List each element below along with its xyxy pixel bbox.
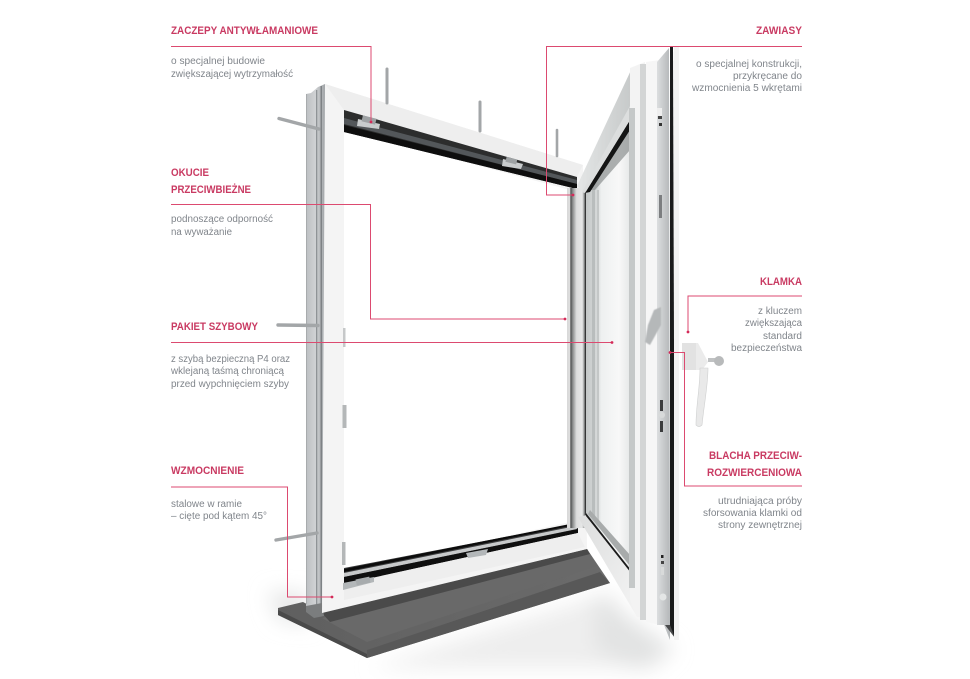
label: pakiet szybowy	[170, 321, 613, 390]
hardware strip	[657, 48, 670, 640]
black gasket	[670, 47, 675, 638]
label: zaczepy antywlamaniowe: ZACZEPY ANTYWŁAMANIOWE	[171, 25, 318, 37]
bottom hardware: keepers	[343, 549, 488, 590]
frame front face	[322, 84, 587, 613]
label: wzmocnienie: stalowe w ramie	[171, 499, 242, 510]
label: zawiasy: wzmocnienia 5 wkrętami	[691, 83, 802, 94]
floor shadow	[268, 592, 675, 670]
label: pakiet szybowy: wklejaną taśmą chroniącą	[170, 366, 284, 377]
bottom reveal	[344, 523, 585, 600]
label: okucie przeciwbiezne: PRZECIWBIEŻNE	[171, 183, 251, 196]
key	[708, 356, 724, 366]
label: blacha przeciwrozwierceniowa	[669, 351, 802, 531]
label: klamka: zwiększająca	[745, 318, 802, 329]
label: okucie przeciwbiezne: podnoszące odporność	[171, 214, 273, 225]
sash top slope	[577, 68, 632, 193]
label: zawiasy: ZAWIASY	[756, 25, 803, 37]
label: wzmocnienie: – cięte pod kątem 45°	[171, 511, 267, 522]
label: okucie przeciwbiezne: OKUCIE	[171, 167, 209, 179]
label: zaczepy antywlamaniowe	[171, 25, 372, 123]
anchor rods	[276, 69, 557, 540]
label: wzmocnienie: WZMOCNIENIE	[171, 465, 244, 477]
label: blacha przeciwrozwierceniowa: ROZWIERCENIOWA	[707, 467, 802, 479]
label: zawiasy: o specjalnej konstrukcji,	[696, 59, 802, 70]
label: zaczepy antywlamaniowe: zwiększającej wytrzymałość	[171, 69, 293, 80]
sash vertical profile	[630, 62, 645, 618]
label: zawiasy: przykręcane do	[733, 71, 802, 82]
open sash	[577, 47, 679, 640]
handle	[682, 343, 724, 426]
top reveal	[344, 110, 577, 189]
label: klamka: z kluczem	[758, 306, 802, 317]
right jamb	[567, 188, 586, 528]
jamb hardware	[342, 328, 346, 565]
label: blacha przeciwrozwierceniowa: utrudniająca próby	[718, 496, 802, 507]
label: okucie przeciwbiezne	[171, 167, 566, 320]
glass pane	[586, 124, 630, 572]
label: klamka: standard	[763, 331, 802, 342]
label: blacha przeciwrozwierceniowa: BLACHA PRZECIW-	[709, 450, 802, 462]
label: klamka	[687, 276, 802, 354]
label: okucie przeciwbiezne: na wyważanie	[171, 227, 232, 238]
window frame	[278, 84, 610, 658]
window sill	[278, 549, 610, 658]
label: pakiet szybowy: przed wypchnięciem szyby	[171, 379, 289, 390]
top hardware: keepers	[357, 115, 523, 169]
hardware details	[657, 108, 666, 600]
frame side profile	[306, 84, 325, 618]
label: klamka: KLAMKA	[760, 276, 802, 288]
label: zaczepy antywlamaniowe: o specjalnej budowie	[171, 56, 265, 67]
label: blacha przeciwrozwierceniowa: strony zewnętrznej	[718, 520, 802, 531]
label: pakiet szybowy: z szybą bezpieczną P4 oraz	[171, 354, 290, 365]
label: wzmocnienie	[171, 465, 333, 598]
label: pakiet szybowy: PAKIET SZYBOWY	[171, 321, 259, 333]
label: klamka: bezpieczeństwa	[731, 343, 802, 354]
espagnolette cam	[645, 307, 661, 345]
label: blacha przeciwrozwierceniowa: sforsowania klamki od	[703, 508, 802, 519]
top face shade	[325, 84, 583, 177]
sash lower slope	[578, 515, 637, 617]
label: zawiasy	[546, 25, 803, 196]
